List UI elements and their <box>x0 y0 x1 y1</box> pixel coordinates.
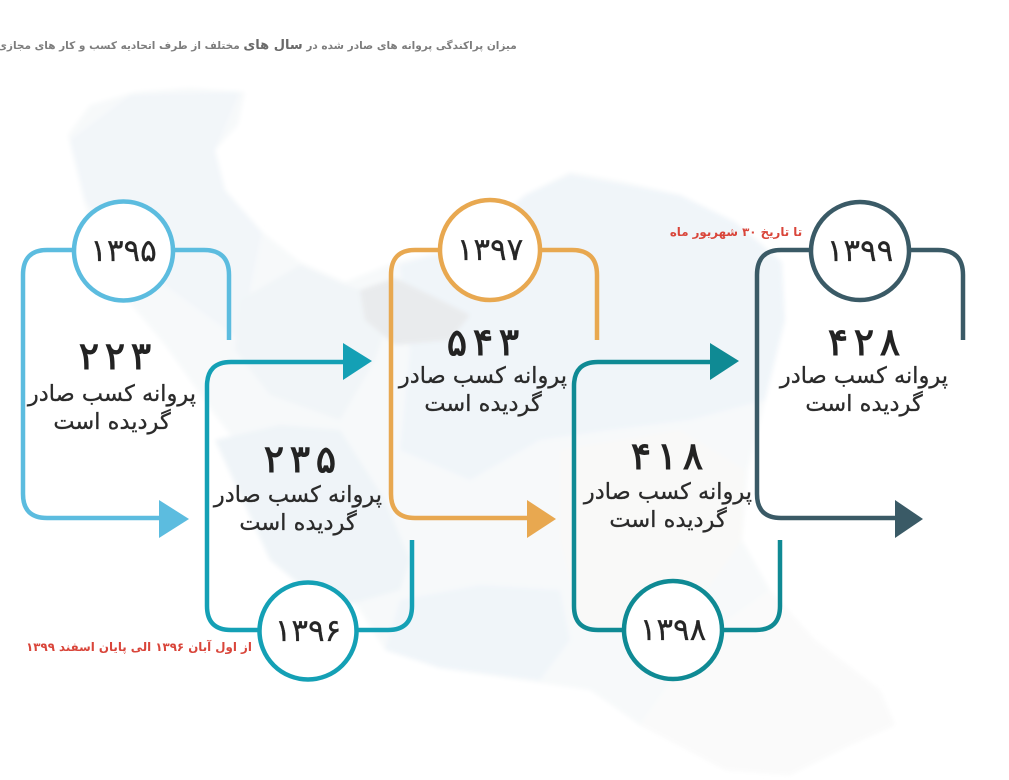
text 543: پروانه کسب صادر <box>398 363 567 389</box>
text 543 <box>398 320 567 417</box>
note: start date: از اول آبان ۱۳۹۶ الی پایان اسفند ۱۳۹۹ <box>26 639 252 655</box>
text 235 <box>213 437 382 536</box>
text 418: گردیده است <box>609 506 727 533</box>
text 223: ۲۲۳ <box>79 334 151 378</box>
year badge 1399: ۱۳۹۹ <box>827 233 893 269</box>
text 223 <box>27 334 196 435</box>
text 428: ۴۲۸ <box>828 320 900 364</box>
year badge 1395 <box>74 202 173 300</box>
year badge 1399 <box>811 202 909 300</box>
year badge 1397: ۱۳۹۷ <box>457 232 523 268</box>
flow line and arrow 1396 <box>207 343 412 630</box>
text 543: ۵۴۳ <box>447 320 519 364</box>
year badge 1398: ۱۳۹۸ <box>640 612 706 648</box>
step 1397 <box>391 200 597 538</box>
text 428: پروانه کسب صادر <box>779 363 948 389</box>
text 235: ۲۳۵ <box>264 437 336 481</box>
text 223: پروانه کسب صادر <box>27 381 196 407</box>
flow line and arrow 1395 <box>23 250 229 538</box>
note: end date: تا تاریخ ۳۰ شهریور ماه <box>670 225 802 240</box>
year badge 1396 <box>260 582 356 680</box>
text 428 <box>779 320 948 417</box>
step 1399 <box>757 202 963 538</box>
year badge 1398 <box>624 581 722 679</box>
text 223: گردیده است <box>53 408 171 435</box>
background map <box>68 88 895 775</box>
text 418 <box>583 434 752 533</box>
text 418: ۴۱۸ <box>631 434 703 478</box>
year badge 1395: ۱۳۹۵ <box>90 233 157 269</box>
step 1396 <box>207 343 412 680</box>
title: میزان پراکندگی پروانه های صادر شده در سال های مختلف از طرف اتحادیه کسب و کار های مجازی <box>0 38 517 53</box>
text 428: گردیده است <box>805 390 923 417</box>
text 235: پروانه کسب صادر <box>213 482 382 508</box>
flow line and arrow 1398 <box>574 343 780 630</box>
text 418: پروانه کسب صادر <box>583 479 752 505</box>
text 235: گردیده است <box>239 509 357 536</box>
year badge 1396: ۱۳۹۶ <box>275 613 341 649</box>
flow line and arrow 1399 <box>757 250 963 538</box>
year badge 1397 <box>440 200 540 300</box>
text 543: گردیده است <box>424 390 542 417</box>
step 1395 <box>23 202 229 538</box>
flow line and arrow 1397 <box>391 250 597 538</box>
step 1398 <box>574 343 780 679</box>
